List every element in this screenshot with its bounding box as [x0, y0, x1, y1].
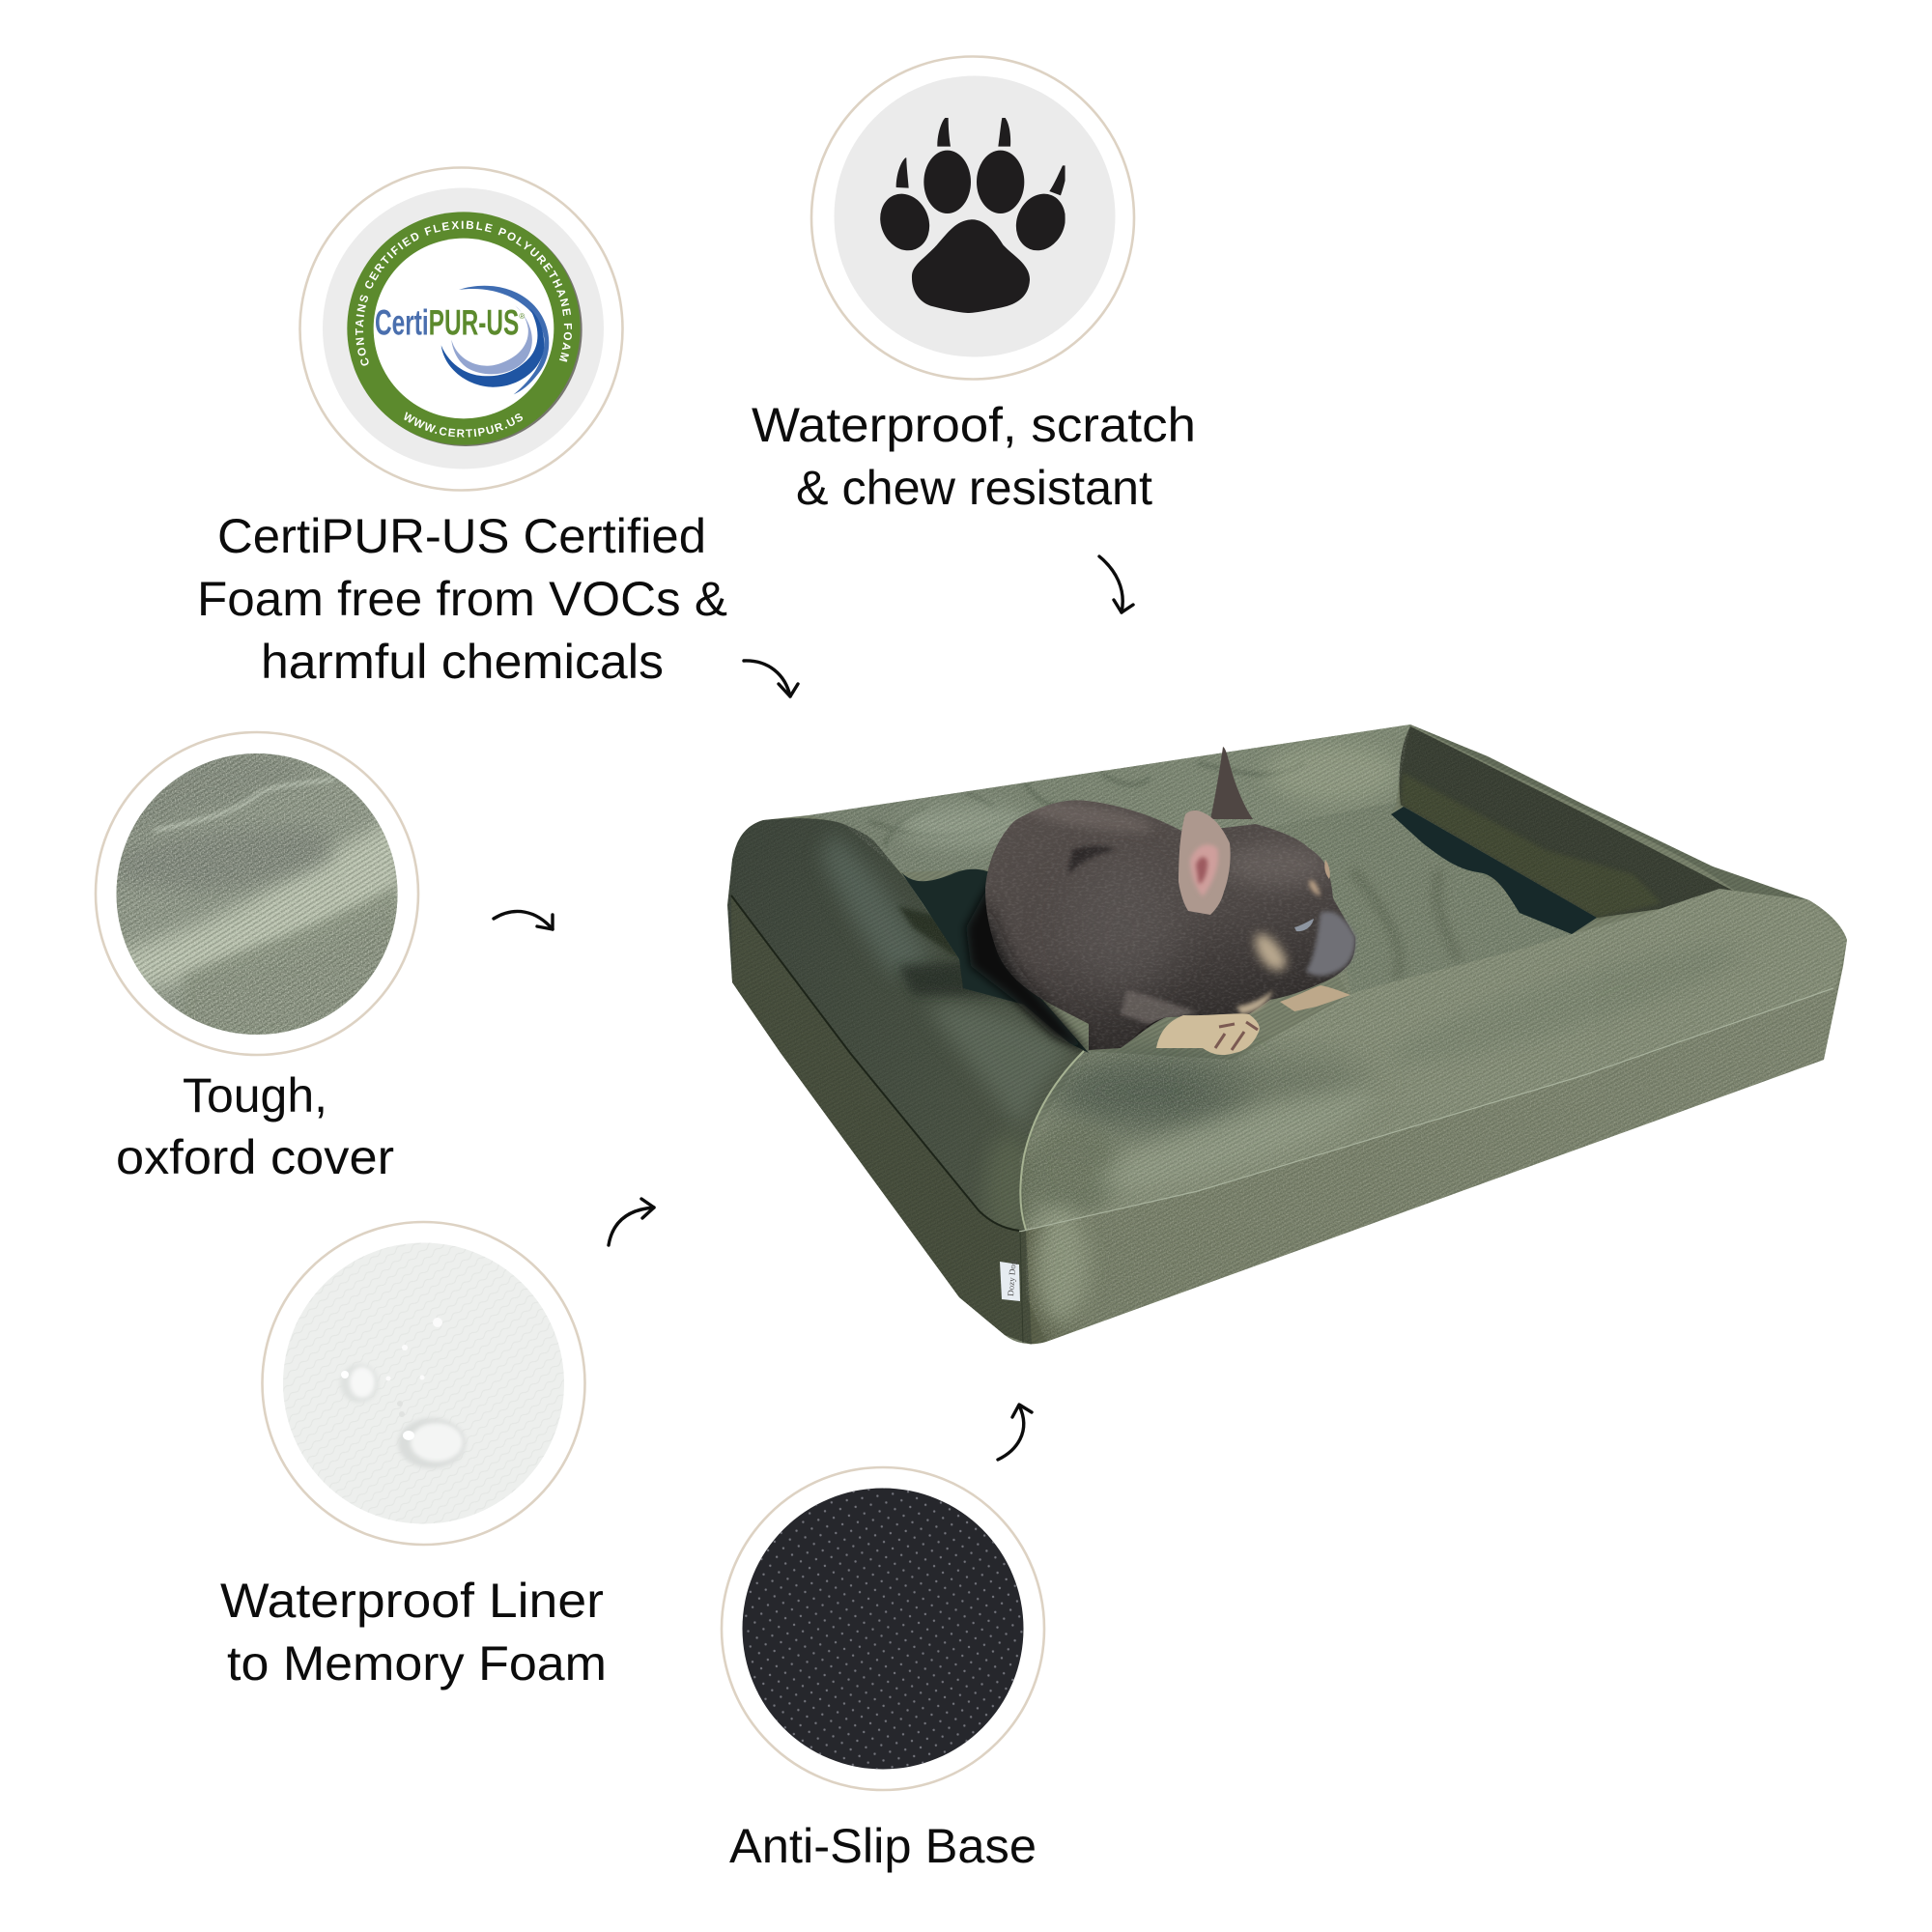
- panel: waterproof liner swatch: [263, 1222, 585, 1545]
- heading: tough oxford cover: oxford cover: [116, 1130, 394, 1184]
- heading: CertiPUR foam: [197, 509, 727, 689]
- heading: waterproof liner: Waterproof Liner: [220, 1574, 604, 1628]
- panel: CertiPUR-US badge: [298, 166, 624, 492]
- icon: CertiPUR-US logo: CONTAINS CERTIFIED FLEXIBLE POLYURETHANE FOAM: [355, 220, 572, 366]
- left bolster and side face: [727, 818, 1084, 1345]
- heading: CertiPUR foam: Foam free from VOCs &: [197, 572, 727, 626]
- french bulldog: [966, 747, 1362, 1063]
- back cushion: [810, 724, 1410, 854]
- heading: CertiPUR foam: CertiPUR-US Certified: [217, 509, 706, 563]
- eye: [1294, 919, 1314, 931]
- icon: water droplets on white liner: [283, 1242, 565, 1524]
- heading: tough oxford cover: [116, 1068, 394, 1184]
- illustration: dog bed with french bulldog: [715, 705, 1874, 1362]
- icon: CertiPUR-US logo: CertiPUR-US: [375, 303, 519, 343]
- heading: tough oxford cover: Tough,: [183, 1068, 327, 1122]
- near paw: [1156, 1013, 1260, 1055]
- arrow: from waterproof text to bed: [1099, 556, 1133, 612]
- heading: waterproof scratch chew: & chew resistant: [796, 461, 1152, 515]
- heading: waterproof scratch chew: Waterproof, scratch: [752, 398, 1196, 452]
- right inner wall: [1399, 724, 1809, 918]
- heading: waterproof liner: [220, 1574, 607, 1690]
- arrow: from waterproof liner to bed: [609, 1199, 654, 1245]
- heading: anti-slip base: Anti-Slip Base: [729, 1819, 1037, 1873]
- icon: CertiPUR-US logo: WWW.CERTIPUR.US: [404, 412, 524, 438]
- heading: CertiPUR foam: harmful chemicals: [261, 635, 664, 689]
- panel: anti-slip base swatch: [722, 1467, 1044, 1790]
- icon: CertiPUR-US logo: [347, 212, 582, 446]
- arrow: from anti-slip base to bed: [998, 1405, 1032, 1460]
- icon: oxford fabric texture: [106, 753, 406, 1036]
- heading: waterproof liner: to Memory Foam: [227, 1636, 607, 1690]
- body: [985, 800, 1355, 1050]
- near ear: [1179, 810, 1231, 915]
- tan markings: [1256, 934, 1286, 971]
- bed tag: Dozy Dog: [1006, 1260, 1018, 1296]
- icon: black dotted anti-slip fabric: [742, 1488, 1024, 1770]
- base face front: [1026, 1058, 1824, 1345]
- heading: waterproof scratch chew: [752, 398, 1196, 515]
- icon: CertiPUR-US logo: ®: [519, 312, 525, 321]
- bed tag: [1000, 1260, 1020, 1301]
- panel: paw print badge: [811, 56, 1134, 379]
- arrow: from oxford swatch to bed: [494, 911, 553, 929]
- dark floor strip: [1391, 807, 1597, 934]
- icon: paw with claws: [872, 118, 1073, 313]
- fabric texture overlays: [715, 705, 1874, 1362]
- bed floor cushion: [1296, 803, 1466, 981]
- far ear: [1210, 747, 1253, 819]
- front bolster top: [1023, 889, 1847, 1230]
- fur shading: [985, 800, 1352, 1049]
- muzzle: [1306, 912, 1355, 976]
- panel: oxford fabric swatch: [96, 732, 418, 1055]
- arrow: from CertiPUR text to bed: [744, 661, 798, 696]
- dark floor left of dog: [901, 869, 1089, 1053]
- base side face: [731, 895, 1032, 1345]
- far paw: [1280, 985, 1350, 1011]
- seams: [731, 895, 1019, 1231]
